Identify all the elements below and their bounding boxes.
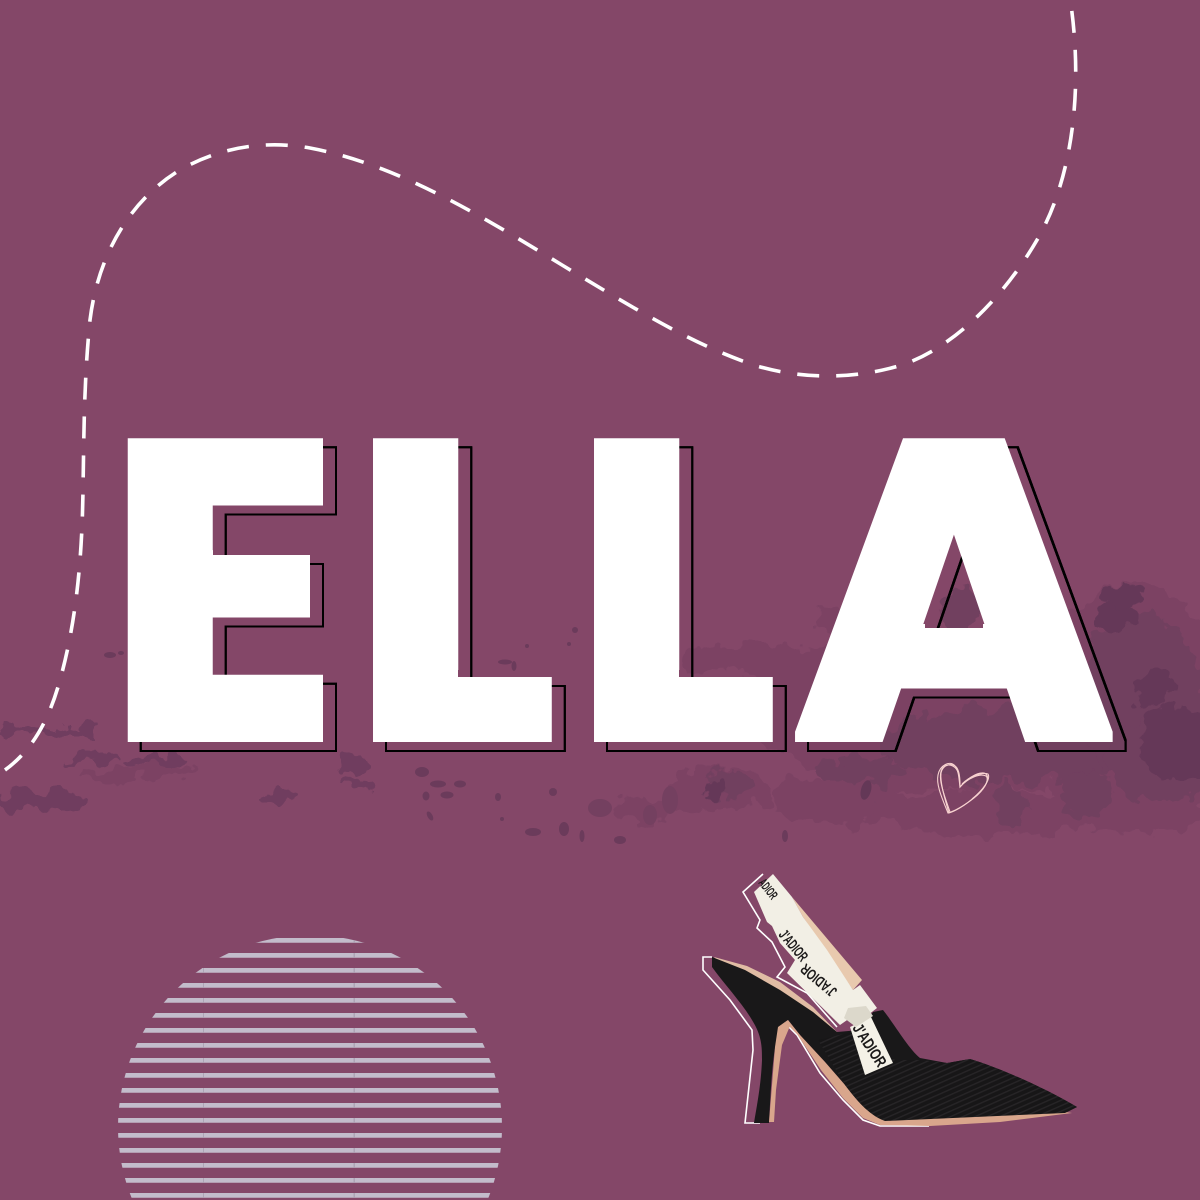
woven upper texture — [818, 1030, 1077, 1121]
watercolor stain — [0, 585, 1200, 836]
shoe illustration: J'ADIOR — [797, 960, 841, 1000]
shoe illustration: J'ADIOR — [775, 927, 811, 965]
title: ELLA: L — [363, 364, 544, 833]
title shadow outline: L — [376, 373, 557, 842]
shoe illustration — [703, 874, 1077, 1126]
title shadow outline — [119, 371, 1125, 842]
title shadow outline: L — [597, 373, 778, 842]
bow tag — [850, 1017, 893, 1075]
nude strap — [792, 897, 862, 990]
black shoe body — [712, 957, 1077, 1123]
striped circle — [110, 930, 510, 1200]
ribbon — [754, 874, 877, 1025]
heel edge — [769, 1022, 790, 1122]
paint speckles — [104, 627, 873, 844]
sole edge — [785, 1020, 1072, 1126]
title: ELLA: E — [106, 362, 342, 833]
icon: hand-drawn heart — [938, 763, 989, 813]
bow knot — [844, 1006, 873, 1027]
title: ELLA: A — [799, 363, 1112, 832]
title: ELLA — [106, 362, 1112, 833]
insole — [714, 957, 837, 1040]
ribbon text: ADIOR — [756, 876, 781, 902]
title: ELLA: L — [584, 364, 765, 833]
shoe illustration: J'ADIOR — [849, 1021, 889, 1071]
dashed path — [5, 0, 1076, 770]
sticker outline — [703, 874, 929, 1126]
title shadow outline: A — [812, 372, 1125, 841]
title shadow outline: E — [119, 371, 355, 842]
